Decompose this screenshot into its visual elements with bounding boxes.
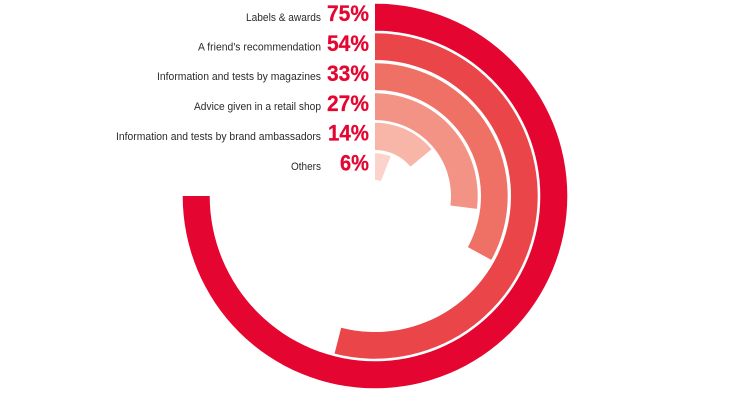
row: A friend's recommendation [198, 31, 369, 56]
ring: A friend's recommendation 54% [335, 33, 538, 359]
label: Information and tests by magazines [157, 71, 321, 83]
row: Information and tests by magazines [157, 61, 369, 86]
value: 14% [328, 120, 369, 146]
label: A friend's recommendation [198, 42, 321, 54]
row: Labels & awards [246, 1, 369, 26]
label: Advice given in a retail shop [194, 101, 321, 113]
ring: Information and tests by brand ambassadors 14% [375, 123, 431, 167]
label: Labels & awards [246, 12, 321, 24]
ring: Others 6% [375, 153, 391, 181]
row: Information and tests by brand ambassadors [116, 120, 369, 146]
value: 75% [327, 1, 369, 26]
radial bar chart [183, 4, 567, 388]
value: 54% [327, 31, 369, 56]
value: 33% [327, 61, 369, 86]
value: 27% [327, 91, 369, 116]
row: Others [291, 150, 369, 176]
ring: Advice given in a retail shop 27% [375, 93, 478, 209]
ring: Information and tests by magazines 33% [375, 63, 508, 260]
row: Advice given in a retail shop [194, 91, 369, 116]
label: Information and tests by brand ambassadors [116, 131, 321, 143]
label: Others [291, 161, 321, 173]
ring: Labels & awards 75% [183, 4, 567, 388]
value: 6% [340, 150, 369, 176]
